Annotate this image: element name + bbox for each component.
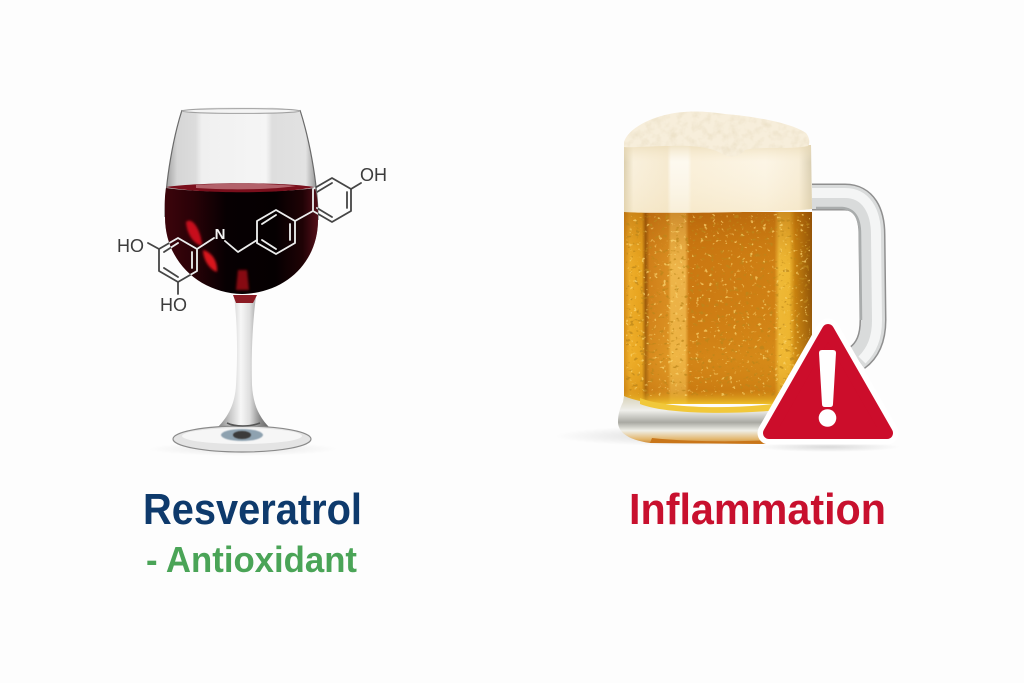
beer mug illustration [555, 112, 900, 452]
red wine [165, 188, 318, 294]
stem [217, 296, 270, 428]
triangle shape [769, 330, 887, 433]
subheading: Antioxidant: - Antioxidant [146, 539, 357, 580]
dark bonds [148, 178, 361, 294]
resveratrol molecule diagram [117, 165, 387, 315]
heading: Inflammation: Inflammation [629, 485, 886, 534]
exclamation bar [819, 350, 836, 407]
exclamation dot [819, 409, 836, 427]
wine glass illustration [148, 107, 338, 456]
warning triangle [756, 330, 900, 452]
triangle shadow [756, 442, 900, 452]
atom label: N: N [215, 226, 225, 243]
infographic canvas [118, 107, 893, 572]
glass bowl [165, 107, 318, 294]
light bonds over wine [169, 186, 318, 276]
glass shadow [148, 442, 338, 456]
foam top [624, 112, 809, 157]
atom label: bottom HO: HO [160, 295, 187, 315]
wine surface [166, 183, 314, 192]
glass rim [182, 109, 300, 113]
atom label: left HO: HO [117, 236, 144, 256]
foot [173, 426, 311, 452]
triangle border [769, 330, 887, 433]
beer body [624, 212, 812, 404]
mug base [618, 396, 790, 444]
mug handle [812, 193, 877, 360]
mug shadow [555, 426, 805, 446]
heading: Resveratrol: Resveratrol [143, 485, 362, 534]
atom label: top OH: OH [360, 165, 387, 185]
beer bubbles [626, 214, 810, 396]
wine highlights [186, 221, 202, 245]
foam head body [624, 145, 812, 213]
